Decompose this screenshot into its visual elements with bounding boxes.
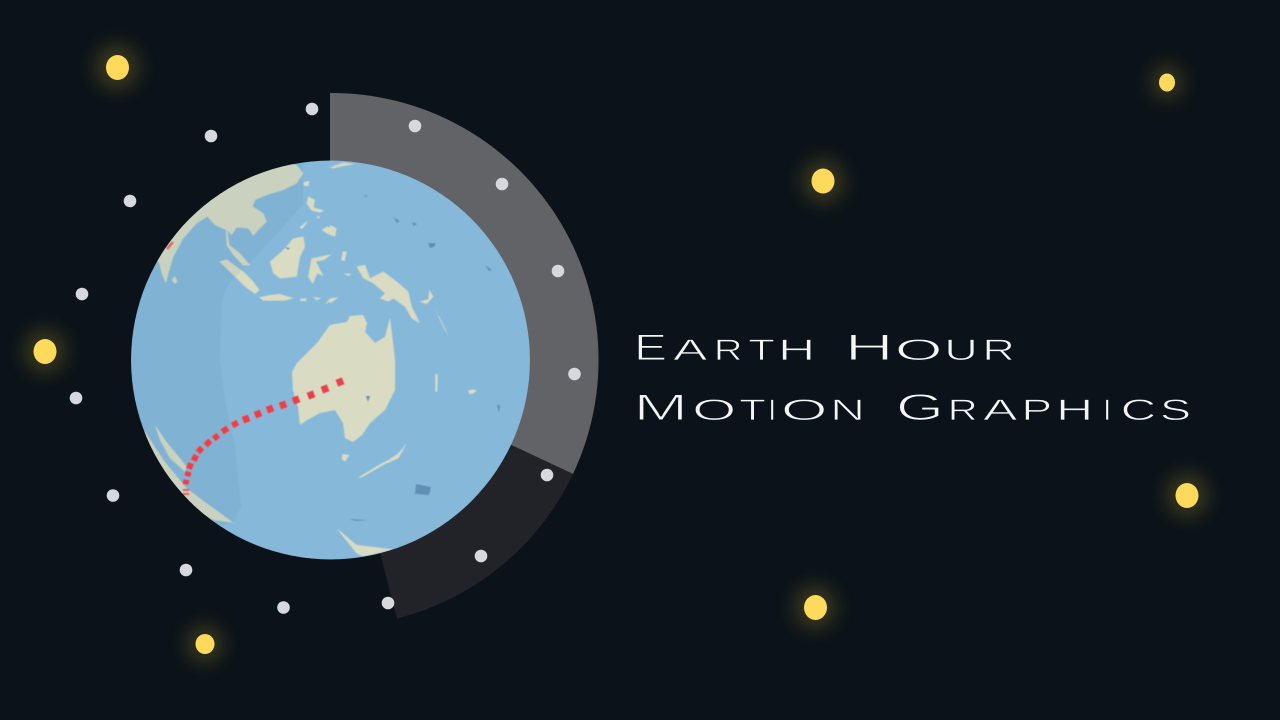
title: Earth Hour Motion Graphics: C — [1121, 393, 1156, 427]
globe — [131, 160, 530, 560]
title: Earth Hour Motion Graphics: R — [982, 334, 1015, 367]
title: Earth Hour Motion Graphics: M — [634, 387, 688, 428]
night shadow on globe — [144, 164, 303, 522]
title: Earth Hour Motion Graphics: O — [781, 393, 827, 426]
title: Earth Hour Motion Graphics: U — [944, 334, 978, 367]
dark night sector — [330, 360, 573, 618]
title: Earth Hour Motion Graphics: R — [714, 334, 742, 367]
title: Earth Hour Motion Graphics: A — [983, 393, 1018, 426]
grey daylight sector — [330, 93, 599, 474]
land masses — [144, 162, 477, 557]
new guinea and pacific islands — [330, 163, 448, 335]
title: Earth Hour Motion Graphics: O — [692, 393, 736, 427]
title: Earth Hour Motion Graphics: N — [830, 394, 865, 427]
title: Earth Hour Motion Graphics: A — [673, 333, 708, 366]
antarctic coast — [144, 426, 233, 523]
title: Earth Hour Motion Graphics: S — [1160, 394, 1191, 427]
ocean — [130, 160, 530, 560]
title: Earth Hour Motion Graphics: I — [1103, 394, 1111, 427]
title: Earth Hour Motion Graphics — [634, 327, 1191, 428]
asia and nearby islands — [157, 164, 337, 304]
title: Earth Hour Motion Graphics: H — [845, 327, 894, 368]
title: Earth Hour Motion Graphics: P — [1022, 394, 1052, 427]
title: Earth Hour Motion Graphics: E — [634, 327, 667, 368]
title: Earth Hour Motion Graphics: R — [948, 393, 978, 427]
title: Earth Hour Motion Graphics: G — [896, 386, 944, 428]
title: Earth Hour Motion Graphics: H — [778, 333, 815, 366]
title: Earth Hour Motion Graphics: I — [768, 394, 776, 427]
yellow stars — [23, 43, 1209, 664]
title: Earth Hour Motion Graphics: H — [1056, 393, 1093, 426]
orbit dots — [70, 103, 581, 614]
title: Earth Hour Motion Graphics: T — [748, 333, 775, 366]
red flight path — [167, 242, 343, 495]
ocean depth marks — [285, 195, 500, 521]
title: Earth Hour Motion Graphics: T — [739, 393, 766, 426]
title: Earth Hour Motion Graphics: O — [895, 334, 942, 367]
australia — [292, 315, 395, 442]
southern islands — [337, 374, 477, 557]
